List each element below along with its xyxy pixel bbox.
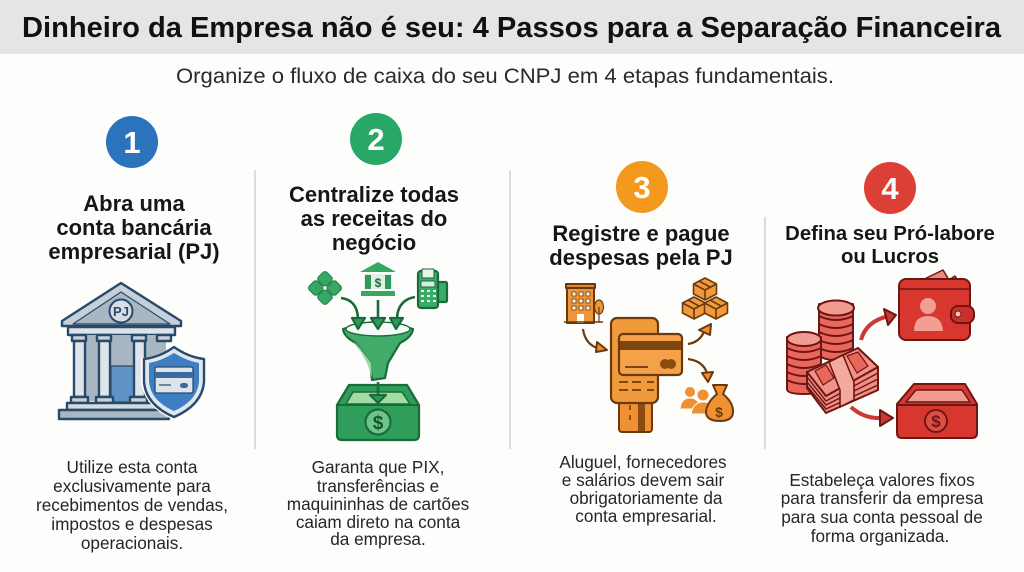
title (0, 0, 1024, 54)
icon: payment card flows (564, 278, 733, 432)
badge 4 (864, 162, 916, 214)
title: Dinheiro da Empresa não é seu: 4 Passos para a Separação Financeira (22, 12, 1002, 44)
badge 3: 3 (633, 170, 651, 205)
badge 4: 4 (881, 171, 899, 206)
panel: step 4 (781, 162, 995, 546)
icon: money to wallet and box (787, 270, 977, 438)
body 4: forma organizada. (811, 526, 949, 546)
panel: step 2 (287, 113, 469, 549)
icon: payment card flows: $ (715, 404, 723, 420)
body 3: obrigatoriamente da (570, 488, 723, 508)
heading 4: Defina seu Pró-labore (785, 223, 995, 245)
body 4: para sua conta pessoal de (781, 507, 983, 527)
heading 1: Abra uma (83, 191, 185, 216)
subtitle: Organize o fluxo de caixa do seu CNPJ em 4 etapas fundamentais. (176, 64, 834, 88)
heading 1: empresarial (PJ) (48, 239, 220, 264)
body 3: conta empresarial. (575, 506, 717, 526)
body 1: Utilize esta conta (67, 457, 198, 477)
panel: step 1 (36, 116, 228, 553)
badge 2 (350, 113, 402, 165)
body 1: operacionais. (81, 533, 183, 553)
heading 2: Centralize todas (289, 182, 459, 207)
body 1: recebimentos de vendas, (36, 495, 228, 515)
badge 1 (106, 116, 158, 168)
heading 3: despesas pela PJ (549, 245, 733, 270)
body 2: da empresa. (330, 529, 426, 549)
body 2: caiam direto na conta (296, 512, 461, 532)
heading 2: negócio (332, 230, 416, 255)
heading 2: as receitas do (301, 206, 447, 231)
body 3: Aluguel, fornecedores (559, 452, 727, 472)
body 1: exclusivamente para (53, 476, 211, 496)
icon: bank with shield (59, 283, 206, 420)
heading 1: conta bancária (56, 215, 212, 240)
body 1: impostos e despesas (51, 514, 213, 534)
icon: money to wallet and box: $ (931, 412, 941, 431)
badge 3 (616, 161, 668, 213)
panel: step 3 (549, 161, 733, 526)
body 3: e salários devem sair (562, 470, 724, 490)
heading 3: Registre e pague (552, 221, 730, 246)
icon: funnel into cash box: $ (373, 413, 384, 434)
body 2: transferências e (317, 476, 439, 496)
badge 1: 1 (123, 125, 141, 160)
heading 4: ou Lucros (841, 246, 939, 268)
body 4: para transferir da empresa (781, 488, 984, 508)
icon: bank with shield: PJ (113, 304, 129, 319)
body 2: Garanta que PIX, (312, 457, 444, 477)
badge 2: 2 (367, 122, 385, 157)
icon: funnel into cash box (307, 262, 447, 440)
icon: funnel into cash box: $ (375, 276, 382, 290)
body 4: Estabeleça valores fixos (789, 470, 975, 490)
body 2: maquininhas de cartões (287, 494, 469, 514)
